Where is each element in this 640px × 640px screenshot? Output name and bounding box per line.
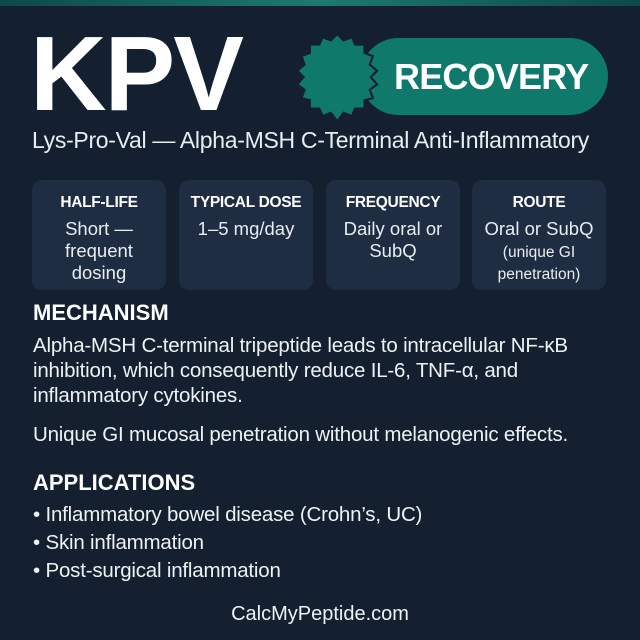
card: route: (unique GI bbox=[503, 244, 575, 261]
card: typical dose bbox=[179, 180, 313, 290]
card: half-life: frequent bbox=[65, 240, 133, 261]
footer: CalcMyPeptide.com bbox=[231, 603, 409, 625]
card: half-life bbox=[32, 180, 166, 290]
mechanism text: Alpha-MSH C-terminal tripeptide leads to intracellular NF-κB inhibition, which consequently reduce IL-6, TNF-α, and inflammatory cytokines. bbox=[33, 334, 568, 407]
card: frequency: SubQ bbox=[369, 240, 417, 261]
card: half-life: HALF-LIFE bbox=[60, 194, 138, 211]
heading: applications: APPLICATIONS bbox=[33, 470, 195, 495]
card: frequency: FREQUENCY bbox=[346, 194, 440, 211]
card: route bbox=[472, 180, 606, 290]
card: route: ROUTE bbox=[513, 194, 565, 211]
card: typical dose: TYPICAL DOSE bbox=[191, 194, 301, 211]
applications list: • Skin inflammation bbox=[33, 531, 204, 554]
card: frequency: Daily oral or bbox=[344, 218, 442, 239]
card: half-life: Short — bbox=[65, 218, 133, 239]
top accent strip bbox=[0, 0, 640, 6]
card: frequency bbox=[326, 180, 460, 290]
heading: mechanism: MECHANISM bbox=[33, 300, 169, 325]
card: typical dose: 1–5 mg/day bbox=[198, 218, 294, 239]
subtitle: Lys-Pro-Val — Alpha-MSH C-Terminal Anti-Inflammatory bbox=[32, 127, 589, 153]
card: route: penetration) bbox=[498, 266, 580, 283]
title: KPV bbox=[30, 15, 242, 133]
applications list: • Inflammatory bowel disease (Crohn’s, UC) bbox=[33, 503, 422, 526]
badge: recovery bbox=[298, 36, 608, 120]
card: route: Oral or SubQ bbox=[484, 218, 594, 239]
card: half-life: dosing bbox=[72, 262, 126, 283]
applications list bbox=[33, 503, 422, 582]
applications list: • Post-surgical inflammation bbox=[33, 559, 281, 582]
mechanism note: Unique GI mucosal penetration without melanogenic effects. bbox=[33, 423, 568, 446]
badge: recovery: RECOVERY bbox=[394, 56, 588, 97]
